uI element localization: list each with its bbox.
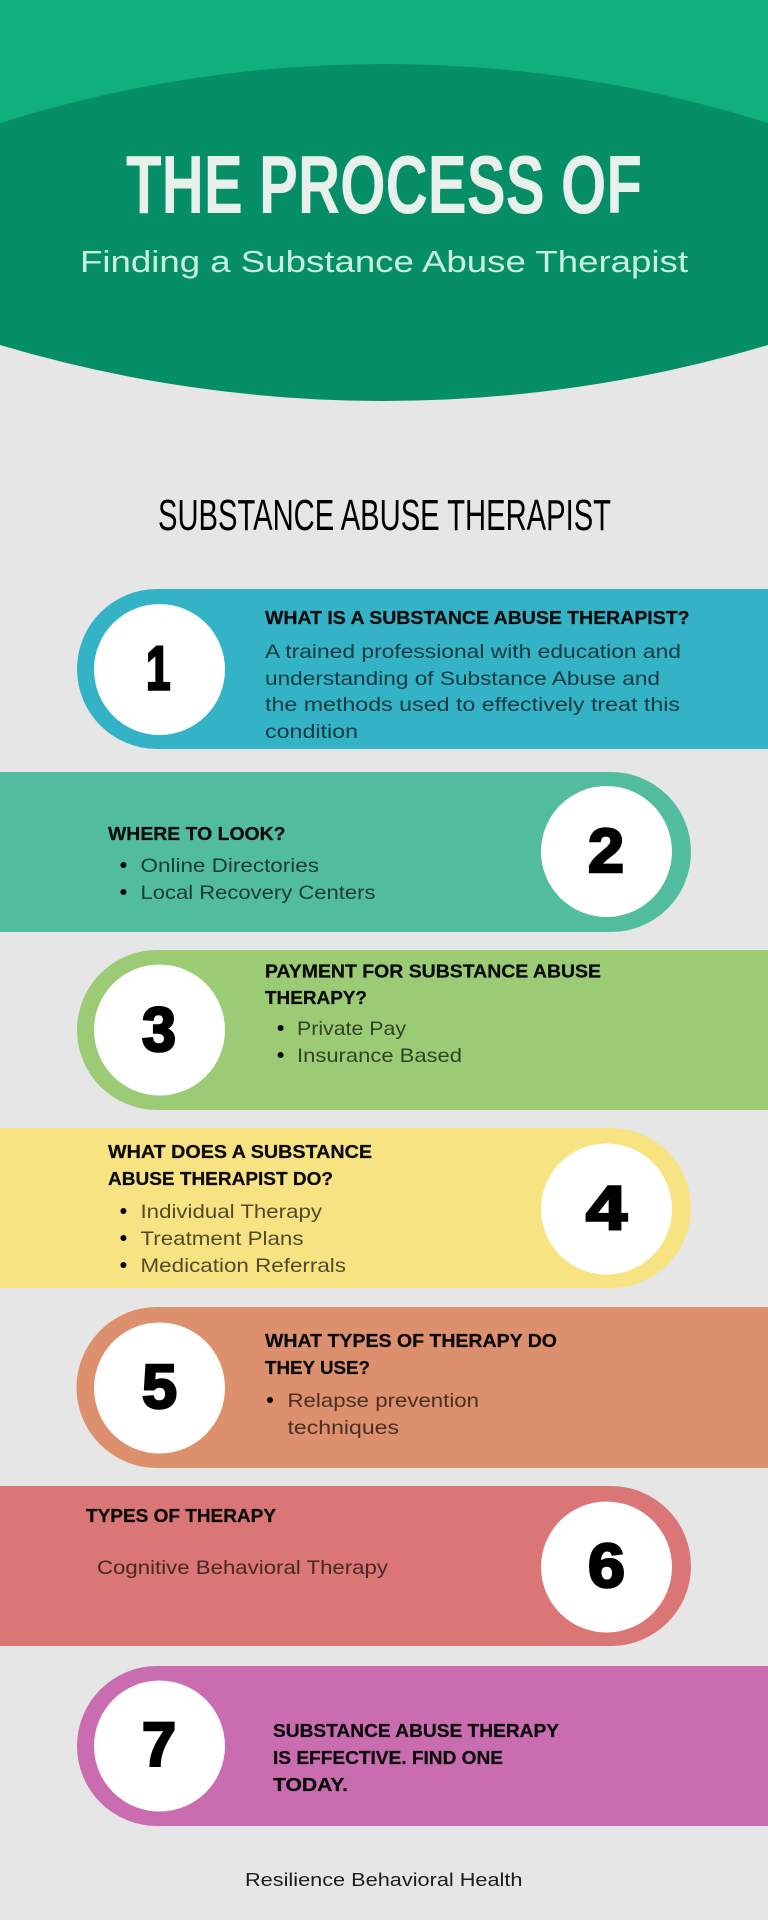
number 1: 1 xyxy=(146,634,170,704)
step 5 heading xyxy=(265,1330,557,1378)
header banner xyxy=(0,0,768,401)
step 3 list: Insurance Based xyxy=(297,1045,462,1067)
panel: step 6 xyxy=(0,1486,691,1646)
step 4 heading: ABUSE THERAPIST DO? xyxy=(108,1168,333,1189)
step 7 message: SUBSTANCE ABUSE THERAPY xyxy=(273,1720,560,1741)
step 3 list: Private Pay xyxy=(297,1018,406,1040)
step 1 body: A trained professional with education and xyxy=(265,641,681,663)
step 7 message: IS EFFECTIVE. FIND ONE xyxy=(273,1747,503,1768)
number 6: 6 xyxy=(588,1532,625,1601)
step 2 list: Online Directories xyxy=(140,855,319,877)
number 3: 3 xyxy=(142,996,176,1065)
step 4 list xyxy=(120,1201,346,1277)
panel: step 3 xyxy=(77,950,768,1110)
step 5 list: Relapse prevention xyxy=(288,1390,479,1412)
step 2 heading: WHERE TO LOOK? xyxy=(108,823,286,844)
panel: step 2 xyxy=(0,772,691,932)
step 3 heading xyxy=(265,960,601,1008)
step 3 heading: THERAPY? xyxy=(265,987,367,1008)
number 4: 4 xyxy=(586,1174,628,1243)
step 4 list: Medication Referrals xyxy=(140,1255,346,1277)
number 7: 7 xyxy=(142,1711,176,1780)
step 3 heading: PAYMENT FOR SUBSTANCE ABUSE xyxy=(265,960,601,982)
step 5 heading: THEY USE? xyxy=(265,1357,370,1378)
step 4 heading: WHAT DOES A SUBSTANCE xyxy=(108,1141,372,1162)
step 7 message: TODAY. xyxy=(273,1774,348,1795)
number 5: 5 xyxy=(142,1353,177,1422)
step 3 list xyxy=(278,1018,462,1067)
number 2: 2 xyxy=(588,817,624,886)
footer credit: Resilience Behavioral Health xyxy=(245,1869,522,1890)
step 5 list: techniques xyxy=(288,1417,399,1439)
step 6 heading: TYPES OF THERAPY xyxy=(86,1505,277,1526)
panel: step 1 xyxy=(77,589,768,749)
step 2 list: Local Recovery Centers xyxy=(140,882,376,904)
step 4 list: Treatment Plans xyxy=(140,1228,304,1250)
step 1 body xyxy=(265,641,681,743)
step 1 heading: WHAT IS A SUBSTANCE ABUSE THERAPIST? xyxy=(265,607,690,628)
step 5 heading: WHAT TYPES OF THERAPY DO xyxy=(265,1330,557,1351)
panel: step 5 xyxy=(76,1307,768,1468)
step 2 list xyxy=(120,855,376,904)
panel: step 4 xyxy=(0,1128,691,1288)
step 1 body: the methods used to effectively treat this xyxy=(265,694,680,716)
step 4 heading xyxy=(108,1141,372,1189)
step 6 body: Cognitive Behavioral Therapy xyxy=(97,1557,388,1579)
step 5 list xyxy=(267,1390,479,1439)
step 1 body: condition xyxy=(265,721,358,743)
step 4 list: Individual Therapy xyxy=(140,1201,322,1223)
step 7 message xyxy=(273,1720,560,1795)
subtitle: Finding a Substance Abuse Therapist xyxy=(80,244,688,279)
step 1 body: understanding of Substance Abuse and xyxy=(265,668,660,690)
panel: step 7 xyxy=(77,1666,768,1826)
